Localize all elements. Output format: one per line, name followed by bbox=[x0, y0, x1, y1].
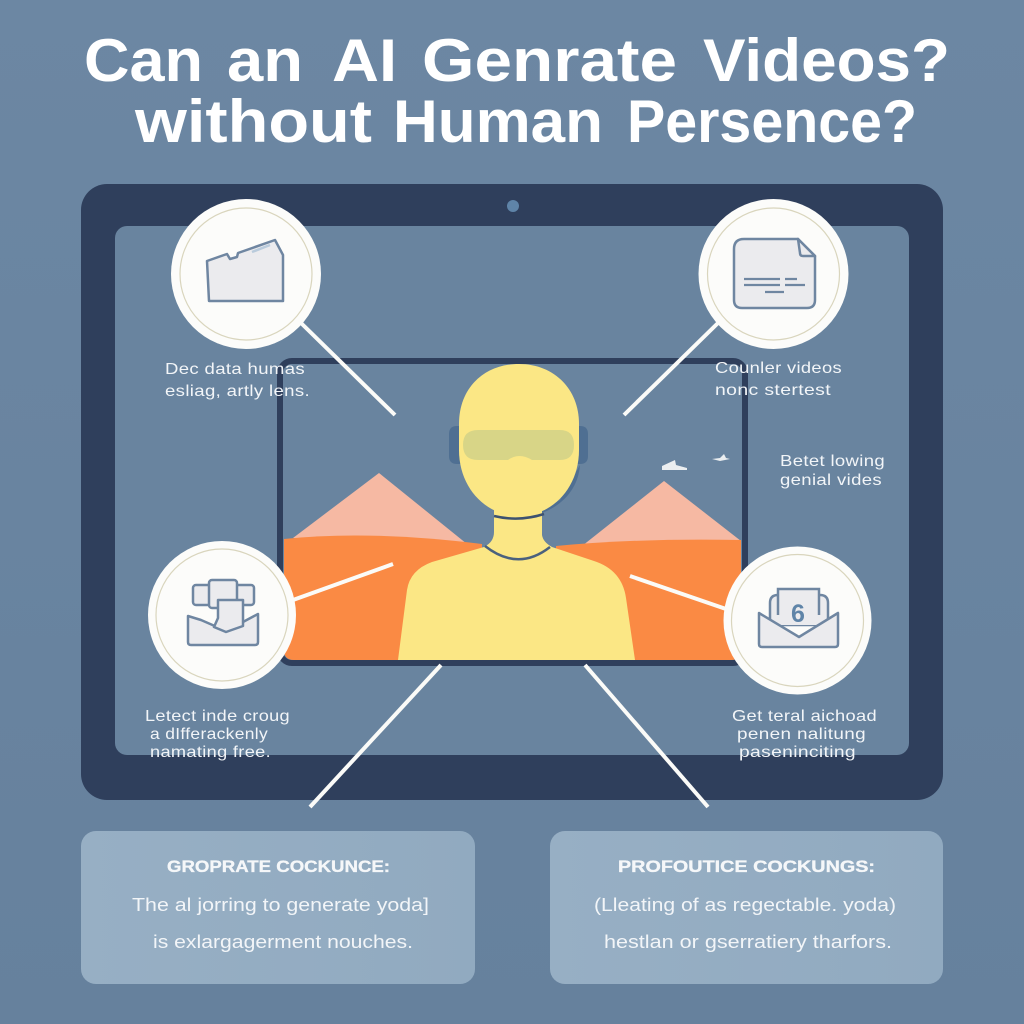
visor bbox=[463, 430, 574, 460]
panel: tablet device bbox=[81, 184, 943, 800]
title: Human bbox=[393, 88, 603, 155]
right mountain bbox=[582, 481, 741, 546]
left mountain bbox=[293, 473, 467, 544]
figure: person with visor bbox=[398, 364, 635, 660]
icon: bottom-right envelope circle: 6 bbox=[791, 600, 805, 628]
right orange hill bbox=[556, 540, 741, 660]
title bbox=[84, 27, 950, 155]
title: an bbox=[227, 27, 303, 94]
title: AI bbox=[332, 27, 397, 94]
text block: bottom-left label: namating free. bbox=[150, 744, 271, 761]
left orange hill bbox=[284, 535, 482, 660]
text block: bottom-right label: paseninciting bbox=[739, 744, 856, 761]
connector lines bbox=[293, 323, 726, 807]
text block: bottom-left label: a dIfferackenly bbox=[150, 726, 268, 743]
text block: top-left label: Dec data humas bbox=[165, 361, 305, 378]
text block: bottom-left label: Letect inde croug bbox=[145, 708, 290, 725]
text block: bottom-left label bbox=[145, 708, 290, 761]
body: left summary bbox=[132, 894, 429, 952]
text block: top-right label: Counler videos bbox=[715, 360, 842, 377]
text block: right label: genial vides bbox=[780, 472, 882, 489]
panel: central video frame bbox=[280, 361, 745, 663]
body: left summary: is exlargagerment nouches. bbox=[153, 931, 413, 952]
text block: bottom-right label: Get teral aichoad bbox=[732, 708, 877, 725]
body: left summary: The al jorring to generate yoda] bbox=[132, 894, 429, 915]
icon: tablet camera bbox=[507, 200, 519, 212]
icon: bottom-left inbox circle bbox=[148, 541, 296, 689]
heading: left summary: GROPRATE COCKUNCE: bbox=[167, 857, 390, 876]
text block: bottom-right label bbox=[732, 708, 877, 761]
body: right summary: (Lleating of as regectable. yoda) bbox=[594, 894, 896, 915]
title: without bbox=[134, 88, 372, 155]
body: right summary bbox=[594, 894, 896, 952]
title: Videos? bbox=[703, 27, 950, 94]
text block: top-right label bbox=[715, 360, 842, 399]
small white birds bbox=[662, 454, 730, 470]
title: Genrate bbox=[422, 27, 677, 94]
panel: bottom-right summary bbox=[550, 831, 943, 984]
text block: top-right label: nonc stertest bbox=[715, 382, 831, 399]
icon: bottom-right envelope circle bbox=[724, 546, 872, 694]
text block: top-left label: esliag, artly lens. bbox=[165, 383, 310, 400]
text block: right label: Betet lowing bbox=[780, 453, 885, 470]
title: Persence? bbox=[627, 88, 917, 155]
title: Can bbox=[84, 27, 203, 94]
icon: top-left clapper circle bbox=[171, 199, 321, 349]
text block: bottom-right label: penen nalitung bbox=[737, 726, 866, 743]
body: right summary: hestlan or gserratiery tharfors. bbox=[604, 931, 892, 952]
heading: right summary: PROFOUTICE COCKUNGS: bbox=[618, 857, 875, 876]
panel: bottom-left summary bbox=[81, 831, 475, 984]
icon: top-right document circle bbox=[698, 199, 848, 349]
text block: top-left label bbox=[165, 361, 310, 400]
text block: right label bbox=[780, 453, 885, 489]
